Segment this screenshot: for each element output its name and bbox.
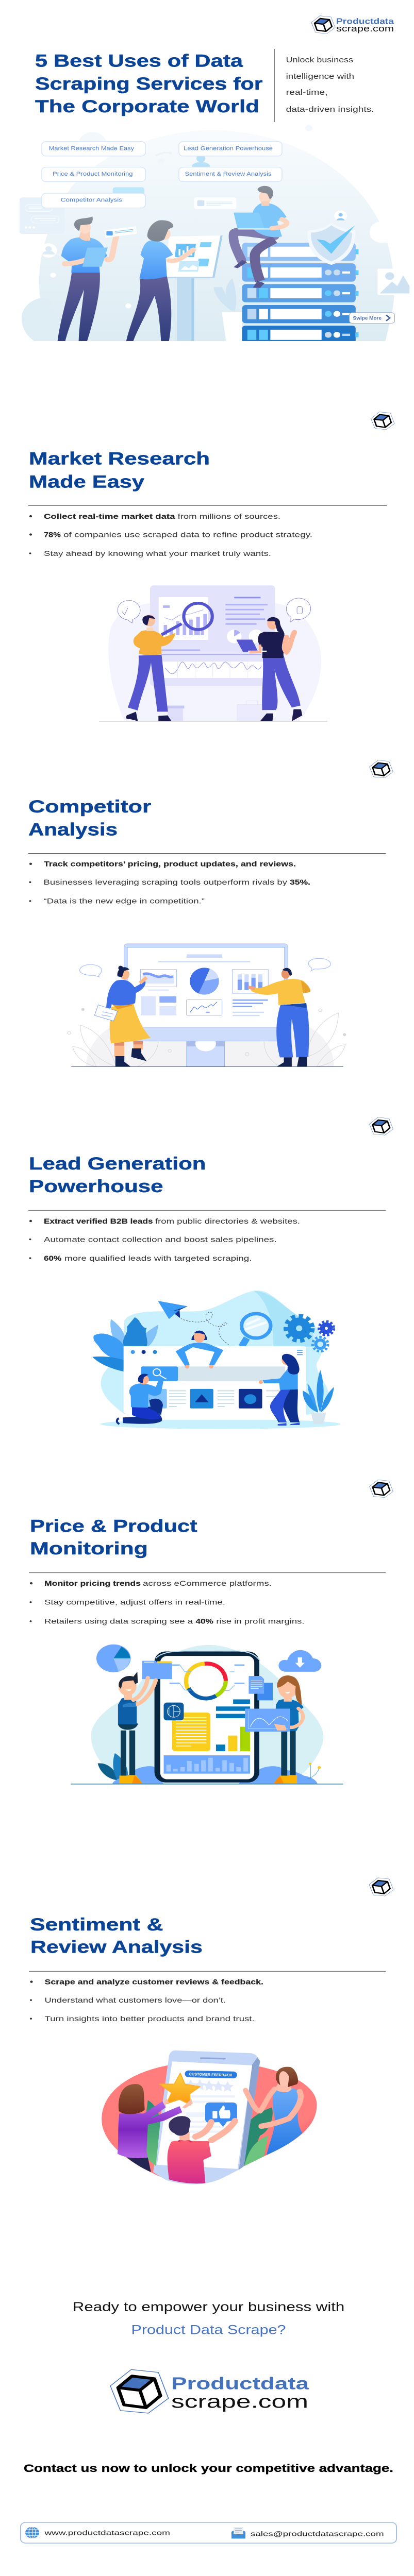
illustration: lead search window bbox=[92, 1291, 341, 1429]
line chart bbox=[187, 999, 222, 1015]
button: Swipe More bbox=[350, 313, 395, 323]
pill: Lead Generation Powerhouse: Lead Generation Powerhouse bbox=[184, 145, 273, 151]
user badge small bbox=[334, 211, 347, 221]
bullets: Understand what customers love—or don’t. bbox=[44, 1996, 226, 2005]
person: top bbox=[176, 1331, 223, 1368]
heading bbox=[29, 449, 210, 492]
panel: Lead Generation bbox=[28, 1154, 386, 1429]
person: man in yellow bbox=[248, 968, 310, 1066]
pill: Market Research Made Easy: Market Research Made Easy bbox=[49, 145, 134, 151]
logo: Productdata scrape.com large: scrape.com bbox=[171, 2391, 308, 2412]
heading: Sentiment & bbox=[30, 1914, 163, 1934]
chat panel bbox=[20, 197, 64, 234]
chart card bbox=[245, 1709, 290, 1732]
logo: Productdata scrape.com bbox=[311, 16, 394, 33]
document bbox=[172, 1713, 210, 1751]
illustration: dashboard monitor bbox=[68, 944, 346, 1067]
heading: Competitor bbox=[28, 797, 152, 816]
bullets: of companies use scraped data to refine product strategy. bbox=[63, 531, 312, 539]
kiosk board bbox=[165, 235, 223, 341]
pill: Lead Generation Powerhouse bbox=[179, 142, 282, 156]
heading: Monitoring bbox=[30, 1539, 148, 1558]
bullets: Monitor pricing trends bbox=[44, 1580, 141, 1588]
speech bubble: check bbox=[118, 600, 140, 623]
bullets: Stay competitive, adjust offers in real-time. bbox=[44, 1599, 225, 1606]
browser window bbox=[124, 1346, 306, 1420]
area chart bbox=[140, 970, 177, 987]
person: man with tablet bbox=[58, 216, 137, 341]
bullets: 35%. bbox=[290, 878, 310, 887]
pill: Sentiment & Review Analysis bbox=[179, 167, 282, 182]
pill: Competitor Analysis bbox=[42, 193, 145, 208]
heading: Made Easy bbox=[29, 472, 144, 492]
heading: Price & Product bbox=[30, 1516, 197, 1536]
person: woman in skirt bbox=[94, 966, 151, 1066]
pill label bbox=[185, 2071, 237, 2078]
bullets bbox=[29, 1217, 300, 1262]
logo icon bbox=[370, 1117, 393, 1135]
panel: Price & Product Monitoring bbox=[29, 1516, 386, 1785]
contact line: Contact us now to unlock your competitive advantage. bbox=[24, 2462, 393, 2475]
pie chart bbox=[190, 968, 219, 995]
heading: Analysis bbox=[28, 820, 118, 839]
documents bbox=[249, 1676, 273, 1700]
title bbox=[35, 51, 263, 116]
panel: Competitor Analysis bbox=[28, 797, 386, 1067]
bullets: 78% bbox=[44, 531, 61, 539]
pill: Price & Product Monitoring bbox=[42, 167, 145, 182]
footer contact bar: www.productdatascrape.com bbox=[44, 2530, 170, 2537]
bullets: Stay ahead by knowing what your market truly wants. bbox=[44, 550, 271, 557]
person: woman purple bbox=[118, 2084, 193, 2172]
bullets: 60% bbox=[44, 1255, 62, 1262]
bullets: Scrape and analyze customer reviews & feedback. bbox=[44, 1978, 263, 1986]
bullets: Extract verified B2B leads bbox=[44, 1217, 153, 1225]
heading: Lead Generation bbox=[29, 1154, 206, 1173]
logo: Productdata scrape.com large: Productdata bbox=[171, 2374, 309, 2393]
logo: Productdata scrape.com: scrape.com bbox=[336, 24, 394, 33]
person: man bbox=[118, 1672, 156, 1784]
person: kneeling man bbox=[117, 1374, 164, 1424]
logo: Productdata scrape.com large bbox=[110, 2369, 309, 2413]
potted plant bbox=[303, 1370, 334, 1424]
tagline: intelligence with bbox=[286, 72, 354, 80]
heading: Review Analysis bbox=[30, 1937, 203, 1957]
logo icon bbox=[369, 1878, 393, 1896]
bullets: rise in profit margins. bbox=[216, 1618, 305, 1625]
bullets: more qualified leads with targeted scraping. bbox=[64, 1255, 252, 1262]
panel: call to action bbox=[21, 2300, 396, 2543]
folder bbox=[142, 1661, 172, 1679]
plants bbox=[145, 2100, 273, 2166]
bullets bbox=[30, 1978, 263, 2023]
icon: envelope bbox=[231, 2527, 245, 2538]
rating stars bbox=[185, 2079, 234, 2092]
shield check bbox=[307, 223, 355, 265]
pill: Competitor Analysis: Competitor Analysis bbox=[61, 197, 122, 203]
bullets: Turn insights into better products and brand trust. bbox=[44, 2015, 255, 2023]
heading bbox=[30, 1516, 197, 1558]
bullets: Automate contact collection and boost sales pipelines. bbox=[44, 1236, 277, 1244]
logo icon bbox=[370, 760, 393, 778]
paper plane bbox=[158, 1301, 230, 1346]
panel: hero bbox=[20, 16, 409, 341]
image card bbox=[377, 269, 409, 295]
badge bbox=[164, 1703, 184, 1720]
CTA question: Ready to empower your business with bbox=[73, 2300, 344, 2314]
star bbox=[160, 2073, 200, 2105]
bullets: 40% bbox=[195, 1618, 213, 1625]
CTA question: Product Data Scrape? bbox=[131, 2323, 286, 2337]
phone bbox=[155, 1651, 260, 1783]
illustration: market analysts bbox=[99, 585, 327, 721]
bullets: from millions of sources. bbox=[178, 513, 280, 520]
person: man pink bbox=[168, 2116, 235, 2183]
icon: globe bbox=[25, 2527, 39, 2538]
heading bbox=[28, 797, 152, 839]
donut chart bbox=[186, 1664, 226, 1699]
phone bbox=[153, 2050, 260, 2184]
heading: Market Research bbox=[29, 449, 210, 468]
tagline: data-driven insights. bbox=[286, 105, 374, 113]
server stack bbox=[242, 243, 358, 341]
illustration: customer feedback phone bbox=[102, 2050, 317, 2184]
logo icon bbox=[370, 1480, 393, 1498]
heading bbox=[29, 1154, 206, 1196]
pie chart bbox=[96, 1645, 130, 1672]
leaves bbox=[92, 1317, 158, 1371]
bushes bbox=[112, 1766, 318, 1784]
speech bubble: idea bbox=[286, 598, 311, 622]
bullets: Track competitors’ pricing, product updates, and reviews. bbox=[44, 860, 296, 868]
person: woman bbox=[274, 1675, 304, 1784]
floating card bbox=[194, 197, 236, 209]
bullets: Collect real-time market data bbox=[44, 513, 175, 520]
person: woman bbox=[259, 1354, 300, 1426]
person: man sitting with laptop bbox=[234, 186, 287, 288]
bullets bbox=[30, 1580, 304, 1625]
tagline: Unlock business bbox=[286, 56, 353, 64]
bullets: Retailers using data scraping see a bbox=[44, 1618, 193, 1625]
thumbs up bubble bbox=[205, 2103, 237, 2127]
tagline: real-time, bbox=[286, 89, 328, 97]
person: man with magnifier bbox=[126, 615, 176, 721]
panel: Sentiment & Review Analysis bbox=[29, 1914, 386, 2184]
speech bubbles bbox=[80, 958, 330, 977]
sprouts bbox=[308, 1765, 319, 1779]
title: Scraping Services for bbox=[35, 74, 263, 93]
footer contact bar bbox=[21, 2522, 396, 2543]
heading bbox=[30, 1914, 203, 1957]
logo icon bbox=[371, 412, 394, 430]
person: woman with laptop bbox=[236, 617, 302, 721]
person: woman blue dress bbox=[245, 2067, 302, 2155]
cloud download bbox=[278, 1650, 321, 1672]
bullets: from public directories & websites. bbox=[155, 1217, 300, 1225]
footer contact bar: sales@productdatascrape.com bbox=[251, 2531, 384, 2538]
bullets: across eCommerce platforms. bbox=[143, 1580, 272, 1588]
CTA question bbox=[73, 2300, 344, 2337]
pill: Price & Product Monitoring: Price & Product Monitoring bbox=[53, 171, 133, 177]
heading: Powerhouse bbox=[29, 1176, 163, 1196]
user badge bbox=[40, 243, 57, 258]
bullets: Businesses leveraging scraping tools outperform rivals by bbox=[43, 878, 288, 887]
plant bbox=[97, 1753, 128, 1781]
pill label: CUSTOMER FEEDBACK bbox=[189, 2072, 233, 2077]
bullets bbox=[29, 513, 312, 557]
magnifier bbox=[242, 1314, 271, 1347]
illustration: phone dashboard bbox=[71, 1645, 343, 1785]
logo: Productdata scrape.com: Productdata bbox=[336, 17, 394, 26]
bar chart bbox=[233, 970, 268, 993]
gears bbox=[286, 1316, 334, 1351]
title: The Corporate World bbox=[35, 96, 259, 116]
pill: Market Research Made Easy bbox=[42, 142, 145, 156]
bullets bbox=[29, 860, 310, 905]
bottom chart bbox=[164, 1755, 250, 1774]
panel: Market Research bbox=[28, 412, 394, 721]
hero illustration bbox=[20, 125, 409, 341]
title: 5 Best Uses of Data bbox=[35, 51, 243, 71]
person: woman at board bbox=[126, 220, 193, 341]
button: Swipe More: Swipe More bbox=[353, 316, 382, 321]
pill: Sentiment & Review Analysis: Sentiment & Review Analysis bbox=[185, 171, 272, 177]
tagline bbox=[286, 56, 374, 113]
plant pot bbox=[214, 278, 242, 341]
bullets: “Data is the new edge in competition.” bbox=[43, 897, 205, 905]
